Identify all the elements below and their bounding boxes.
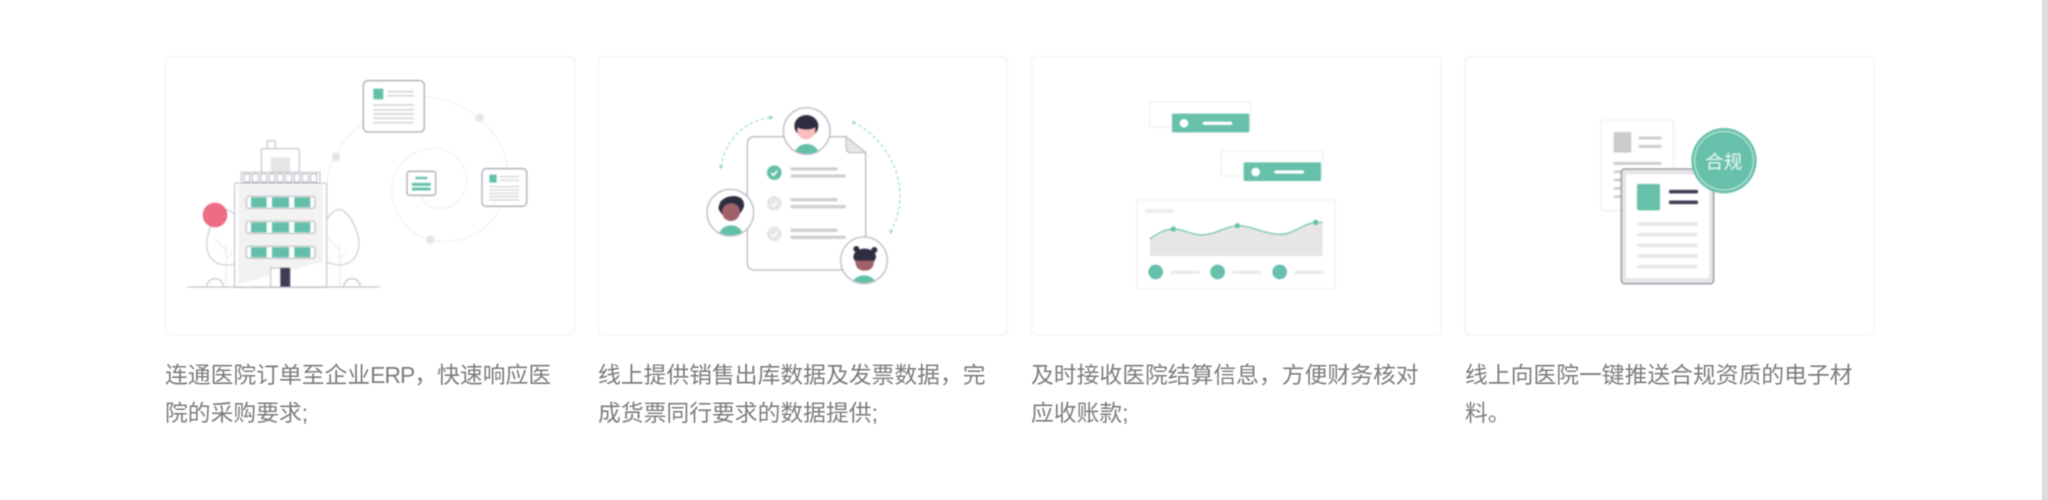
panel: hospital ERP orders (165, 57, 575, 335)
caption: settlement: 及时接收医院结算信息，方便财务核对 (1031, 362, 1419, 388)
icon: checklist document (747, 137, 866, 270)
panel: settlement info and chart (1032, 57, 1441, 335)
caption: hospital orders (165, 362, 551, 426)
scrollbar (2042, 0, 2048, 500)
avatar: bottom right (839, 236, 889, 285)
icon: right document (482, 169, 527, 206)
caption: compliance (1465, 362, 1853, 426)
notification card 1 (1150, 102, 1251, 132)
dashed arrows (721, 117, 900, 232)
front document (1621, 169, 1714, 284)
badge: compliance: 合规 (1705, 151, 1742, 172)
caption: compliance: 料。 (1465, 400, 1511, 426)
caption: settlement: 应收账款; (1031, 400, 1129, 426)
icon: large document (363, 81, 424, 132)
caption: sales data (598, 362, 986, 426)
avatar: top (782, 106, 832, 156)
back document (1601, 120, 1674, 211)
icon: hospital building (235, 141, 327, 287)
caption: settlement (1031, 362, 1419, 426)
caption: sales data: 成货票同行要求的数据提供; (598, 400, 878, 426)
windows (246, 196, 315, 258)
panel: sales and invoice data checklist (598, 57, 1007, 335)
illustrations: four panels (165, 56, 1874, 335)
badge: compliance (1691, 128, 1757, 193)
caption: hospital orders: 院的采购要求; (165, 400, 308, 426)
icon: small document (407, 171, 436, 195)
avatar: left (706, 188, 755, 238)
panel: compliance documents (1465, 57, 1874, 335)
icon: trees (207, 209, 360, 287)
notification card 2 (1221, 151, 1323, 181)
caption: sales data: 线上提供销售出库数据及发票数据，完 (598, 362, 986, 388)
area chart panel (1137, 200, 1335, 289)
orbit dots (332, 113, 484, 244)
icon: pink circle (203, 203, 227, 227)
caption: compliance: 线上向医院一键推送合规资质的电子材 (1465, 362, 1853, 388)
orbit lines (327, 97, 508, 242)
caption: hospital orders: 连通医院订单至企业ERP，快速响应医 (165, 362, 551, 388)
